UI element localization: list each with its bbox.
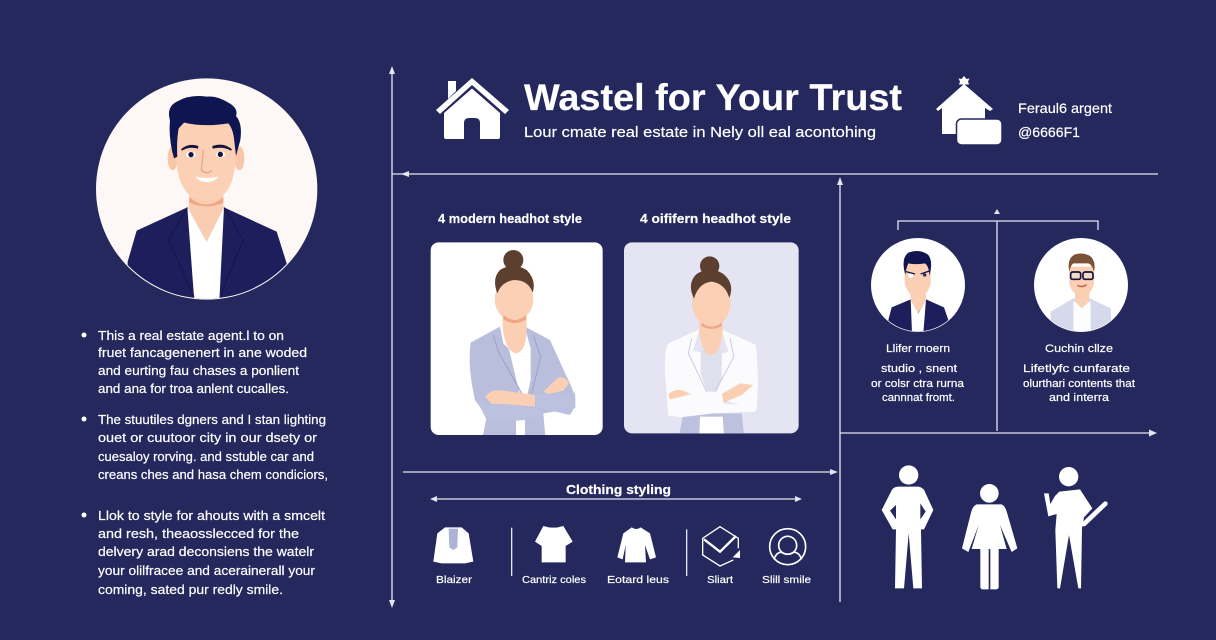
caption: right portrait: Cuchin cllze <box>1045 343 1113 355</box>
icon: house with card <box>936 76 1002 145</box>
neck <box>189 192 223 242</box>
title: Wastel for Your Trust <box>524 77 902 118</box>
bullet list: Llok to style for ahouts with a smcelt <box>98 508 325 523</box>
clothing labels: Slill smile <box>762 574 811 586</box>
caption: right portrait: olurthari contents that <box>1023 378 1135 390</box>
caption: left portrait: or colsr ctra rurna <box>871 378 965 390</box>
bullet list: This a real estate agent.l to on <box>98 328 284 343</box>
bullet list: delvery arad deconsiens the watelr <box>98 544 315 559</box>
heading: modern headshot: 4 modern headhot style <box>438 211 582 226</box>
bullet list: fruet fancagenenert in ane woded <box>98 345 307 360</box>
hair <box>169 96 241 158</box>
clothing labels <box>436 574 811 586</box>
bullet list: your olilfracee and acerainerall your <box>98 563 316 578</box>
icon: man hands on hips <box>882 465 933 588</box>
panel: headshot cards <box>431 242 799 437</box>
bullet list <box>82 328 328 597</box>
caption: right portrait: and interra <box>1049 392 1110 404</box>
nose <box>201 150 212 173</box>
icon: smile avatar <box>770 529 806 565</box>
bullet list: cuesaloy rorving. and sstuble car and <box>98 449 314 464</box>
bullet list: coming, sated pur redly smile. <box>98 582 283 597</box>
card: woman in white blazer <box>624 242 799 435</box>
icon: t-shirt <box>535 526 573 562</box>
caption: left portrait: studio , snent <box>881 363 957 375</box>
icon: woman in dress <box>962 484 1017 589</box>
axis lines and arrows <box>389 66 1158 608</box>
infographic canvas <box>82 66 1158 608</box>
clothing labels: Sliart <box>707 574 733 586</box>
clothing labels: Cantriz coles <box>522 574 586 586</box>
portrait: main agent <box>96 78 317 303</box>
icon: man gesturing <box>1044 467 1105 588</box>
heading: different headshot: 4 oififern headhot style <box>640 211 791 226</box>
bullet list: creans ches and hasa chem condiciors, <box>98 467 328 482</box>
caption: left portrait: cannnat fromt. <box>882 392 955 404</box>
icon: house <box>436 78 509 139</box>
clothing labels: Eotard leus <box>607 574 669 586</box>
contact text: Feraul6 argent <box>1018 100 1112 116</box>
caption: left portrait: Llifer rnoern <box>886 343 950 355</box>
clothing icons <box>433 526 806 576</box>
bullet list: and ana for troa anlent cucalles. <box>98 381 289 396</box>
bracket connector <box>898 209 1098 431</box>
bullet list: and eurting fau chases a ponlient <box>98 363 299 378</box>
shirt <box>187 207 224 302</box>
jacket <box>127 207 287 303</box>
card: woman in lavender blazer <box>431 242 603 437</box>
icon: blazer <box>433 527 473 563</box>
bullet list: ouet or cuutoor city in our dsety or <box>98 430 318 445</box>
divider <box>685 529 689 576</box>
double arrow <box>430 496 802 502</box>
eyebrows <box>181 145 232 151</box>
icon: sweater <box>617 527 656 562</box>
contact text <box>1018 100 1112 140</box>
divider <box>510 528 514 576</box>
panel: two style portraits <box>871 238 1128 333</box>
caption: right portrait: Lifetlyfc cunfarate <box>1023 363 1130 375</box>
contact text: @6666F1 <box>1018 124 1080 140</box>
clothing labels: Blaizer <box>436 574 473 586</box>
pose silhouettes <box>882 465 1105 589</box>
subtitle: Lour cmate real estate in Nely oll eal acontohing <box>524 124 876 141</box>
caption: left portrait <box>871 343 965 404</box>
caption: right portrait <box>1023 343 1135 404</box>
eyes <box>186 152 195 158</box>
bullet list: and resh, theaosslecced for the <box>98 526 299 541</box>
icon: shirt box <box>703 527 740 566</box>
heading: clothing styling: Clothing styling <box>566 482 671 497</box>
smile <box>195 177 219 182</box>
bullet list: The stuutiles dgners and I stan lighting <box>98 412 326 427</box>
head <box>168 146 178 170</box>
portrait: glasses man <box>1034 238 1128 333</box>
portrait: dark suit man <box>871 238 965 333</box>
